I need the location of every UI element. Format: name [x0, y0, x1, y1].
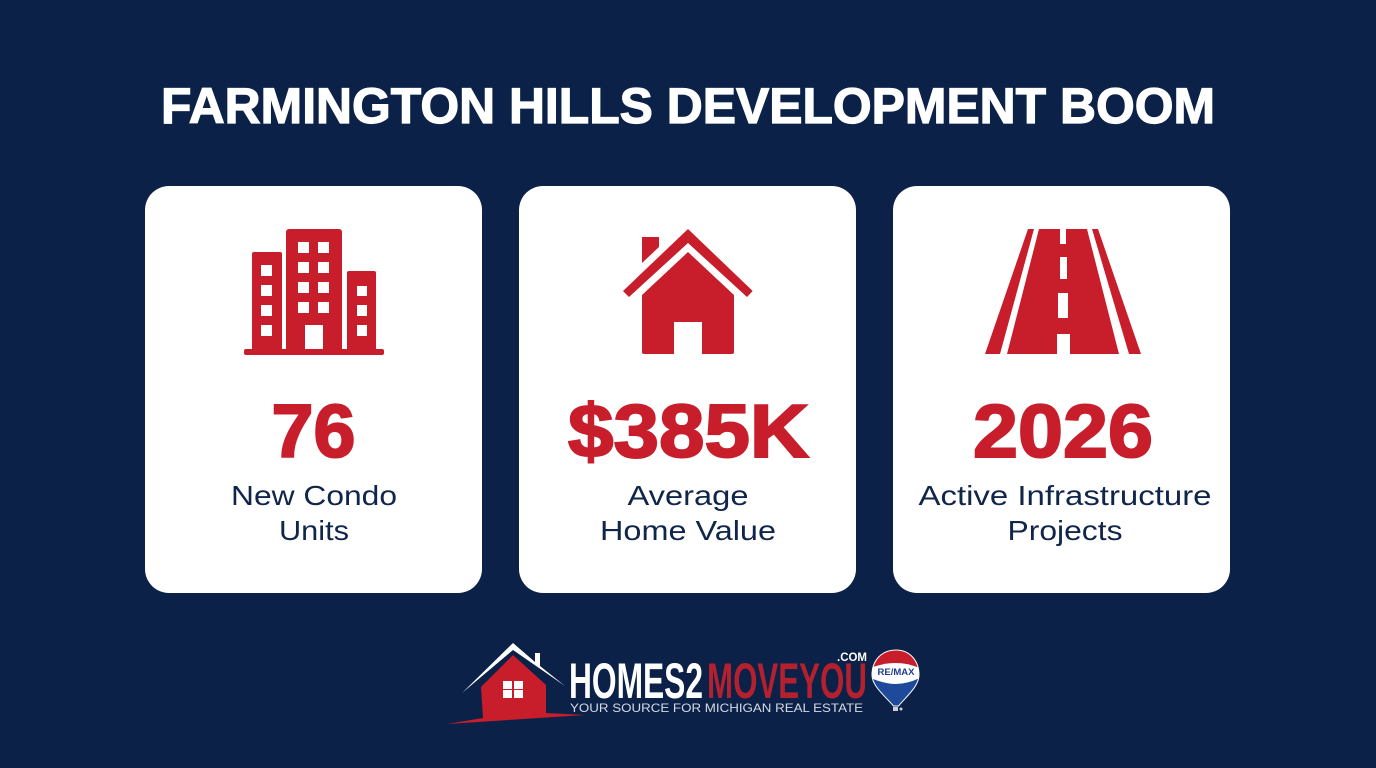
logo wordmark [569, 650, 867, 709]
icon: road [985, 229, 1141, 354]
logo wordmark: MOVEYOU [707, 653, 867, 709]
label: average home value: Home Value [600, 515, 776, 546]
label: active infrastructure projects: Projects [1008, 515, 1122, 546]
logo tagline: YOUR SOURCE FOR MICHIGAN REAL ESTATE [570, 701, 863, 715]
icon: house [623, 229, 753, 354]
label: new condo units: Units [279, 515, 349, 546]
panel: active infrastructure projects [893, 186, 1230, 593]
label: active infrastructure projects: Active Infrastructure [918, 480, 1212, 511]
label: active infrastructure projects [918, 480, 1212, 546]
label: average home value [600, 480, 776, 546]
icon: RE/MAX balloon: RE/MAX [878, 667, 915, 678]
logo wordmark: HOMES2 [569, 653, 703, 709]
stat: 76: 76 [272, 389, 356, 473]
logo: Homes2MoveYou [447, 643, 922, 724]
label: average home value: Average [628, 480, 748, 511]
label: new condo units [231, 480, 397, 546]
panel: average home value [519, 186, 856, 593]
title: FARMINGTON HILLS DEVELOPMENT BOOM [161, 78, 1215, 134]
stat: 2026: 2026 [973, 389, 1153, 473]
icon: logo house [447, 643, 585, 724]
icon: RE/MAX balloon [872, 650, 920, 711]
stat: $385K: $385K [568, 389, 809, 473]
label: new condo units: New Condo [231, 480, 397, 511]
icon: apartment buildings [244, 229, 384, 355]
logo wordmark: .COM [837, 650, 867, 664]
panel: new condo units [145, 186, 482, 593]
